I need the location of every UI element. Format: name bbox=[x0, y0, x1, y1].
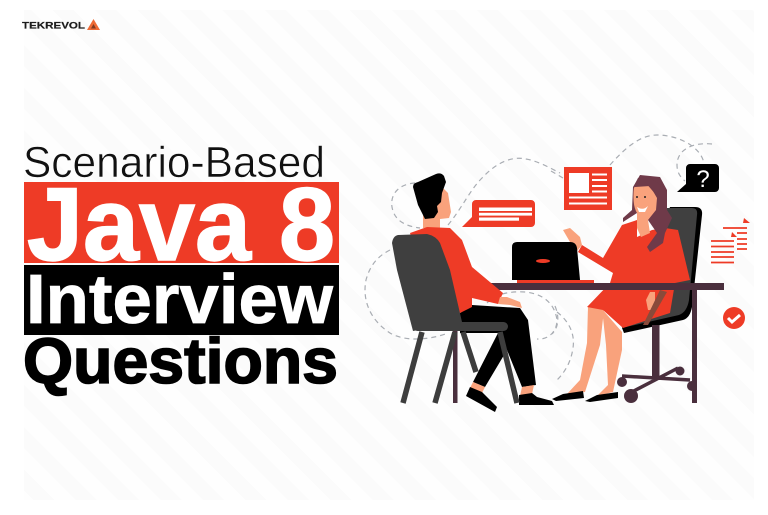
woman's hand bbox=[563, 228, 582, 251]
illustration: interview scene bbox=[365, 135, 750, 412]
check badge bbox=[723, 307, 745, 329]
woman's fringe bbox=[633, 178, 661, 196]
woman bbox=[552, 175, 690, 402]
man's neck and face bbox=[423, 186, 451, 228]
logo: TEKREVOL bbox=[22, 20, 85, 32]
woman's face bbox=[633, 186, 657, 237]
woman's dress bbox=[578, 220, 690, 328]
dashed connector lines bbox=[365, 135, 712, 380]
man bbox=[410, 173, 554, 412]
man's speech bubble bbox=[462, 200, 535, 227]
heading: Scenario-Based: Scenario-Based bbox=[23, 138, 325, 187]
banner: Interview: Interview bbox=[26, 260, 334, 338]
question bubble: ? bbox=[696, 166, 710, 193]
desk bbox=[453, 283, 724, 403]
man's chair bbox=[392, 234, 517, 403]
document icon bbox=[564, 167, 612, 210]
man's shoes bbox=[466, 387, 554, 412]
woman's hair back bbox=[623, 175, 672, 252]
heading: Questions: Questions bbox=[23, 325, 338, 397]
laptop bbox=[512, 242, 594, 283]
man's hair bbox=[413, 173, 446, 219]
woman's chair bbox=[617, 207, 702, 403]
papers icon bbox=[711, 218, 750, 262]
logo bbox=[22, 19, 100, 32]
banner: Java 8: Java 8 bbox=[27, 167, 335, 283]
woman's legs bbox=[567, 306, 622, 396]
man's hand bbox=[498, 297, 522, 308]
man's ankles bbox=[470, 382, 534, 396]
question bubble bbox=[677, 164, 719, 193]
man's pants bbox=[460, 305, 536, 387]
woman's shoes bbox=[552, 391, 618, 402]
man's torso bbox=[410, 227, 503, 313]
